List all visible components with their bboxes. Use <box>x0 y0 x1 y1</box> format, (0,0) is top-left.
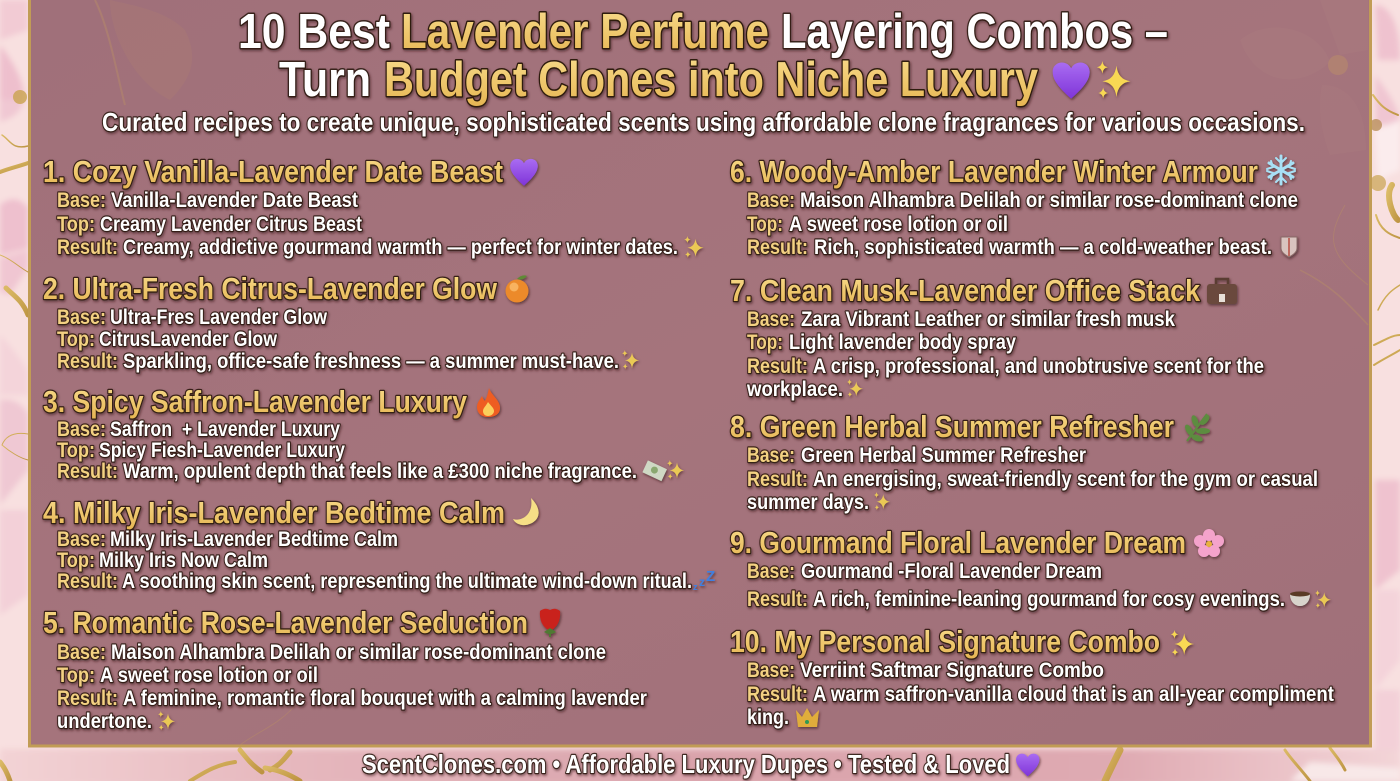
icon: sparkles <box>622 350 639 369</box>
combo 10: Result: <box>747 683 808 706</box>
combo 6: A sweet rose lotion or oil <box>789 213 1008 236</box>
combo 2: Base: <box>57 306 106 329</box>
combo 2: Ultra-Fres Lavender Glow <box>110 306 328 329</box>
footer: ScentClones.com • Affordable Luxury Dupes • Tested & Loved <box>362 749 1010 779</box>
combo 3: Top: <box>57 439 95 462</box>
combo 7: Base: <box>747 308 795 331</box>
icon: blossom <box>1194 529 1224 557</box>
heading 7: 7. Clean Musk-Lavender Office Stack <box>730 273 1201 308</box>
combo 4: Top: <box>57 549 95 572</box>
icon: rose <box>540 609 560 637</box>
combo 7: workplace. <box>746 378 843 401</box>
combo 2: Sparkling, office-safe freshness — a summer must-have. <box>123 350 619 373</box>
combo 8: Result: <box>747 468 808 491</box>
heading 8: 8. Green Herbal Summer Refresher <box>730 409 1174 444</box>
icon: snowflake <box>1267 156 1295 184</box>
title <box>238 5 1168 107</box>
combo 8: Base: <box>747 444 795 467</box>
combo 8 <box>730 409 1318 514</box>
heading 3: 3. Spicy Saffron-Lavender Luxury <box>43 384 468 419</box>
combo 1: Vanilla-Lavender Date Beast <box>111 189 358 212</box>
combo 5: Base: <box>57 641 106 664</box>
combo 2: Top: <box>57 328 95 351</box>
combo 3: Warm, opulent depth that feels like a £300 niche fragrance. <box>123 460 637 483</box>
combo 9: A rich, feminine-leaning gourmand for cosy evenings. <box>813 588 1285 611</box>
icon: sparkles <box>667 460 684 479</box>
heading 6: 6. Woody-Amber Lavender Winter Armour <box>730 154 1258 189</box>
heading 4: 4. Milky Iris-Lavender Bedtime Calm <box>43 495 505 530</box>
icon: purple heart <box>510 159 538 186</box>
title: Lavender Perfume <box>401 5 769 59</box>
combo 5: Top: <box>57 664 95 687</box>
icon: zzz <box>693 568 715 592</box>
combo 6: Result: <box>747 236 808 259</box>
icon: money <box>642 460 667 481</box>
combo 5: A sweet rose lotion or oil <box>100 664 318 687</box>
combo 1: Result: <box>57 236 118 259</box>
icon: herb <box>1183 413 1211 443</box>
combo 5 <box>43 605 647 733</box>
heading 9: 9. Gourmand Floral Lavender Dream <box>730 525 1186 560</box>
combo 3: Saffron + Lavender Luxury <box>110 418 340 441</box>
combo 7: Light lavender body spray <box>789 331 1016 354</box>
combo 4 <box>43 495 715 593</box>
combo 10: Verriint Saftmar Signature Combo <box>800 659 1104 682</box>
icon: shield <box>1281 237 1297 257</box>
combo 4: Base: <box>57 528 106 551</box>
combo 3: Base: <box>57 418 106 441</box>
combo 7 <box>730 273 1264 401</box>
icon: sparkles <box>158 711 175 730</box>
title: Layering Combos – <box>781 5 1168 59</box>
heading 5: 5. Romantic Rose-Lavender Seduction <box>43 605 528 640</box>
combo 2 <box>43 271 639 373</box>
combo 10: Base: <box>747 659 795 682</box>
combo 1: Base: <box>57 189 106 212</box>
combo 10 <box>730 624 1334 729</box>
combo 2: Result: <box>57 350 118 373</box>
icon: footer heart <box>1016 754 1039 776</box>
combo 5: A feminine, romantic floral bouquet with a calming lavender <box>123 687 647 710</box>
combo 8: Green Herbal Summer Refresher <box>801 444 1086 467</box>
title: Budget Clones into Niche Luxury <box>384 53 1038 107</box>
combo 6: Top: <box>747 213 783 236</box>
combo 3: Spicy Fiesh-Lavender Luxury <box>99 439 345 462</box>
combo 4: Milky Iris Now Calm <box>99 549 268 572</box>
combo 8: An energising, sweat-friendly scent for the gym or casual <box>813 468 1318 491</box>
combo 6: Maison Alhambra Delilah or similar rose-dominant clone <box>800 189 1298 212</box>
icon: zzz: z <box>693 582 698 592</box>
combo 1: Creamy, addictive gourmand warmth — perfect for winter dates. <box>123 236 678 259</box>
icon: crown <box>796 708 819 727</box>
icon: sparkles <box>1315 590 1331 608</box>
icon: title sparkles <box>1097 61 1130 98</box>
combo 4: Result: <box>57 570 118 593</box>
combo 5: undertone. <box>57 710 152 733</box>
combo 2: CitrusLavender Glow <box>99 328 278 351</box>
icon: fire <box>477 388 500 417</box>
heading 10: 10. My Personal Signature Combo <box>730 624 1160 659</box>
combo 8: summer days. <box>747 491 869 514</box>
icon: sparkles <box>874 492 890 510</box>
icon: zzz: Z <box>706 568 715 585</box>
combo 7: Top: <box>747 331 783 354</box>
combo 7: A crisp, professional, and unobtrusive scent for the <box>813 355 1264 378</box>
combo 9: Result: <box>747 588 808 611</box>
combo 10: A warm saffron-vanilla cloud that is an all-year compliment <box>813 683 1334 706</box>
combo 6: Base: <box>747 189 795 212</box>
combo 7: Result: <box>747 355 808 378</box>
title: Turn <box>279 53 371 107</box>
combo 9: Base: <box>747 560 795 583</box>
icon: crescent moon <box>513 498 539 525</box>
combo 3 <box>43 384 684 483</box>
heading 2: 2. Ultra-Fresh Citrus-Lavender Glow <box>43 271 498 306</box>
icon: title heart <box>1053 63 1090 99</box>
combo 1: Top: <box>57 213 95 236</box>
icon: briefcase <box>1207 279 1237 304</box>
icon: orange <box>506 275 528 302</box>
combo 4: Milky Iris-Lavender Bedtime Calm <box>110 528 398 551</box>
combo 1: Creamy Lavender Citrus Beast <box>100 213 362 236</box>
icon: coffee <box>1290 592 1310 606</box>
combo 10: king. <box>747 706 789 729</box>
combo 6: Rich, sophisticated warmth — a cold-weather beast. <box>814 236 1272 259</box>
icon: sparkles <box>1171 630 1194 656</box>
combo 4: A soothing skin scent, representing the ultimate wind-down ritual. <box>122 570 692 593</box>
combo 6 <box>730 154 1298 259</box>
combo 9: Gourmand -Floral Lavender Dream <box>801 560 1102 583</box>
combo 5: Result: <box>57 687 118 710</box>
combo 3: Result: <box>57 460 118 483</box>
combo 1 <box>43 154 704 259</box>
combo 5: Maison Alhambra Delilah or similar rose-dominant clone <box>111 641 606 664</box>
icon: zzz: z <box>699 575 705 589</box>
combo 7: Zara Vibrant Leather or similar fresh musk <box>801 308 1175 331</box>
heading 1: 1. Cozy Vanilla-Lavender Date Beast <box>43 154 503 189</box>
title: 10 Best <box>238 5 390 59</box>
combo 9 <box>730 525 1331 611</box>
icon: sparkles <box>684 236 704 258</box>
icon: sparkles <box>847 379 863 397</box>
